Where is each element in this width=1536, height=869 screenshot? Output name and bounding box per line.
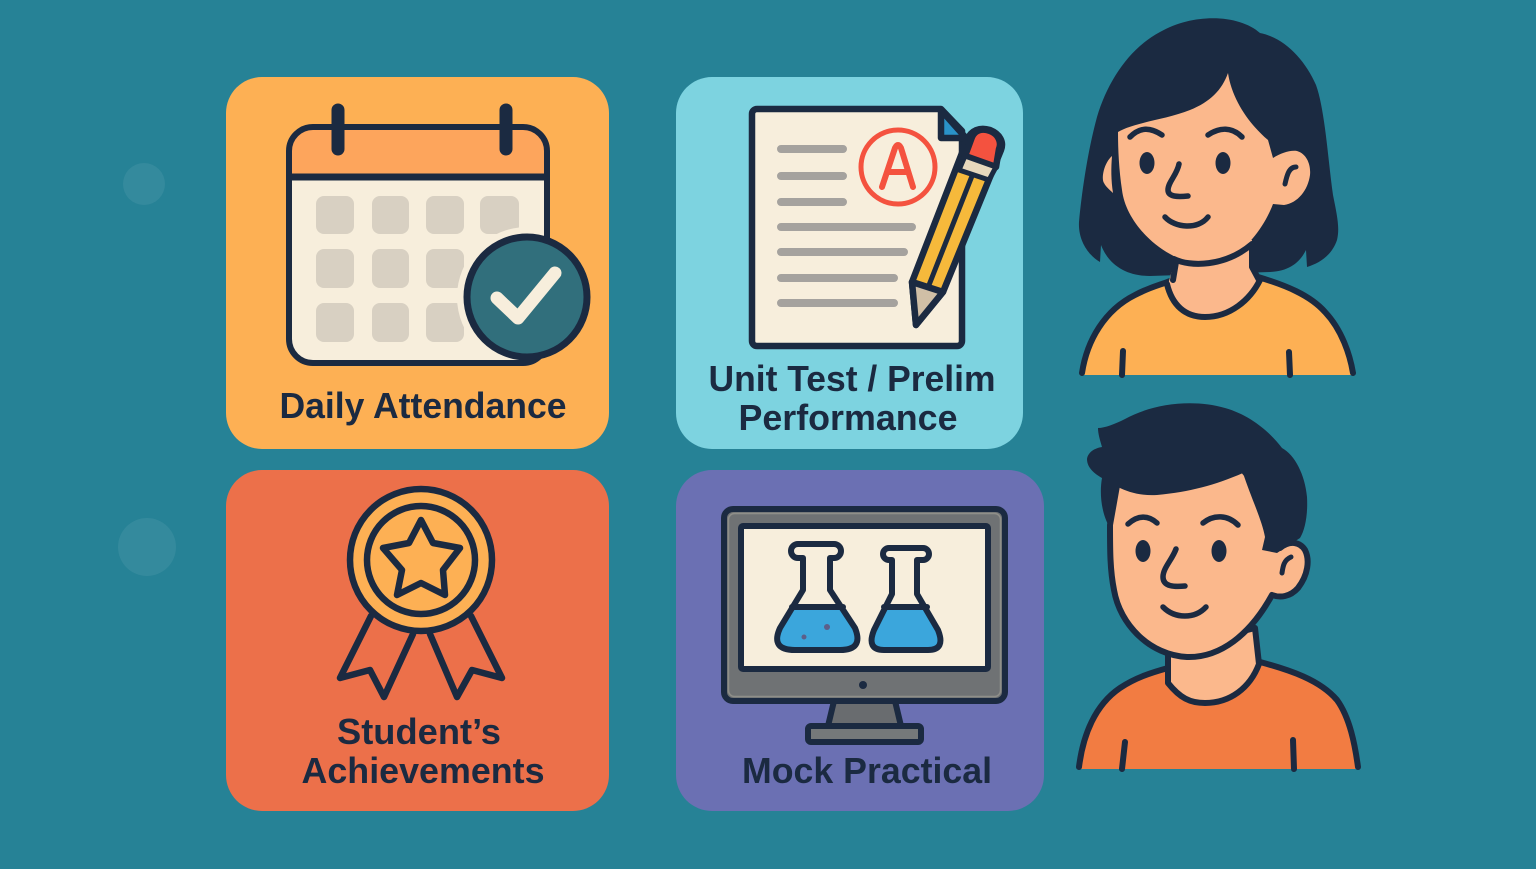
character: girl xyxy=(1079,18,1353,375)
panel: mock practical xyxy=(676,470,1044,811)
panel: unit test: Performance xyxy=(738,397,958,438)
panel: student's achievements xyxy=(226,470,609,811)
icon: monitor with flasks xyxy=(724,509,1005,742)
character: boy xyxy=(1079,403,1358,769)
panel: unit test xyxy=(676,77,1023,449)
label: daily attendance: Daily Attendance xyxy=(280,385,566,426)
icon: award ribbon xyxy=(340,489,502,697)
icon: calendar with check xyxy=(289,110,597,367)
panel: daily attendance xyxy=(226,77,609,449)
label: mock practical: Mock Practical xyxy=(742,750,992,791)
label: unit test: Unit Test / Prelim xyxy=(708,358,996,399)
panel: student's achievements: Achievements xyxy=(302,750,544,791)
label: achievements: Student’s xyxy=(337,711,501,752)
icon: test paper and pencil xyxy=(752,109,1002,346)
